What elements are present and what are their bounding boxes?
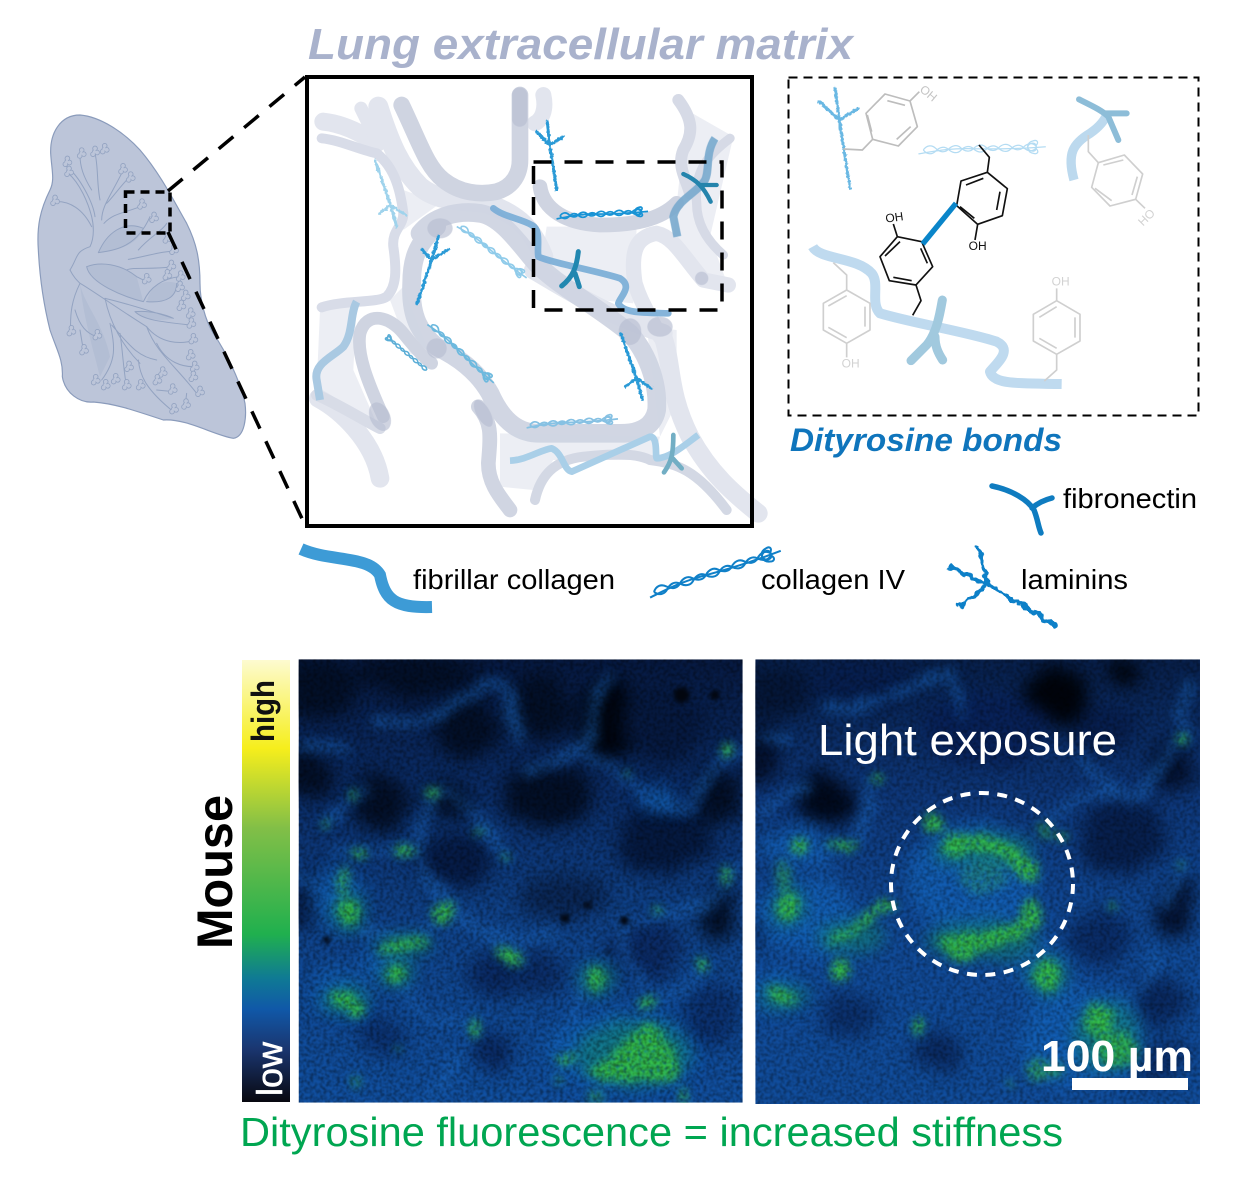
icon: collagen IV — [647, 544, 783, 600]
overlap darker spots — [365, 87, 708, 434]
label: low: low — [249, 1041, 290, 1096]
black OH labels: OH — [969, 239, 987, 253]
heading: dityrosine bonds: Dityrosine bonds — [790, 422, 1062, 458]
micrograph: control — [277, 653, 743, 1104]
black OH labels: OH — [884, 209, 904, 226]
legend: laminins: laminins — [1021, 564, 1128, 595]
legend: laminins — [950, 548, 1128, 626]
green fluorescence — [765, 735, 1188, 1088]
black OH labels — [884, 209, 987, 253]
dark alveolar spaces — [277, 653, 740, 1070]
fibrillar collagen fibres — [316, 138, 715, 472]
grey OH labels: HO — [1135, 206, 1158, 229]
panel: lung extracellular matrix — [316, 87, 758, 513]
dityrosine bond — [923, 203, 956, 244]
dityrosine drawing — [813, 82, 1158, 384]
faded fibres — [813, 88, 1127, 384]
grey OH labels: OH — [917, 82, 940, 105]
fibronectin — [562, 174, 717, 472]
zoom lines — [168, 77, 305, 525]
grey tyrosine molecules — [823, 92, 1145, 381]
light matrix fills — [317, 110, 733, 490]
light bands — [318, 95, 758, 513]
icon: laminins — [950, 548, 1056, 626]
lung inset box — [126, 192, 170, 233]
lung airway ends — [51, 143, 204, 414]
green fluorescence — [322, 744, 732, 1104]
diffuse glow — [752, 823, 1145, 1087]
laminins — [375, 122, 652, 399]
green halo — [322, 892, 690, 1087]
black dityrosine molecule — [880, 145, 1007, 315]
icon: lung — [38, 115, 246, 438]
label: high: high — [245, 680, 281, 742]
lung airway tree — [53, 153, 197, 412]
legend: fibronectin — [992, 483, 1197, 533]
grey OH labels: OH — [842, 356, 860, 370]
label: Mouse: Mouse — [187, 795, 243, 949]
micrograph: light exposure — [737, 658, 1200, 1104]
caption: Dityrosine fluorescence = increased stiffness — [240, 1109, 1063, 1155]
image noise — [755, 659, 1200, 1104]
light exposure circle — [891, 793, 1073, 975]
image noise — [299, 659, 743, 1103]
icon: fibronectin — [992, 486, 1052, 533]
collagen IV — [385, 207, 648, 430]
green halo — [760, 833, 1140, 1073]
septa network — [763, 673, 1190, 997]
dark pores — [323, 687, 720, 954]
grey OH labels — [842, 82, 1158, 370]
legend: fibrillar collagen — [301, 549, 615, 607]
legend: fibronectin: fibronectin — [1063, 483, 1197, 514]
panel: dityrosine bonds — [788, 78, 1198, 416]
mid bands — [317, 95, 730, 510]
colour scale bar — [242, 660, 290, 1102]
icon: fibrillar collagen — [301, 549, 432, 607]
septa network — [300, 680, 740, 1097]
light exposure label: Light exposure — [818, 716, 1117, 765]
legend: collagen IV — [647, 544, 905, 600]
lung airway lobes — [80, 226, 177, 377]
dark alveolar spaces — [737, 658, 1195, 1080]
legend: fibrillar collagen: fibrillar collagen — [413, 564, 615, 595]
grey OH labels: OH — [1052, 275, 1070, 289]
scale label: 100 µm — [1041, 1032, 1193, 1081]
diffuse glow — [310, 787, 700, 1090]
title: Lung extracellular matrix — [308, 20, 855, 69]
matrix zoom box — [534, 162, 722, 310]
matrix frame — [307, 77, 752, 526]
legend: collagen IV: collagen IV — [761, 564, 905, 595]
scale bar — [1041, 1032, 1193, 1090]
